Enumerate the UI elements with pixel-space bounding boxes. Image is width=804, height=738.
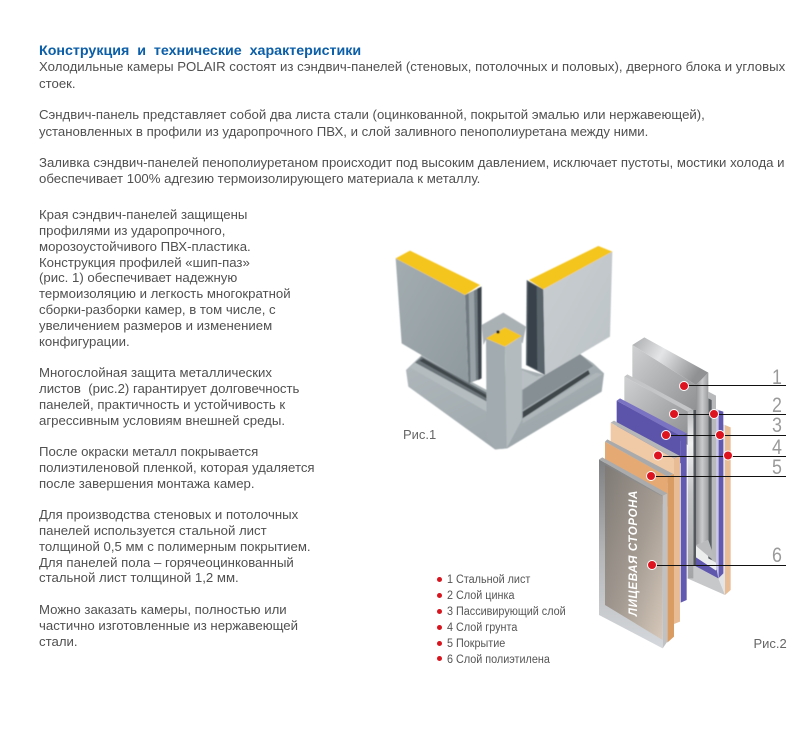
legend: 2 Слой цинка xyxy=(447,590,514,602)
left column text: steel sheet xyxy=(39,507,311,585)
intro paragraph 3: Заливка сэндвич-панелей пенополиуретаном происходит под высоким давлением, исключает пустоты, мостики холода и xyxy=(39,155,785,170)
legend: 4 Слой грунта xyxy=(447,622,517,634)
left column text: stainless option xyxy=(39,602,298,649)
floor of back layers xyxy=(687,565,725,595)
callout 3 xyxy=(662,414,786,440)
intro paragraph 1 xyxy=(39,59,785,90)
intro paragraph 3 xyxy=(39,155,785,186)
figure 1: corner profile with sandwich panels xyxy=(396,246,612,449)
left column text: protection: панелей, практичность и устойчивость к xyxy=(39,397,285,412)
callout 4: 4 xyxy=(772,436,782,459)
intro paragraph 2 xyxy=(39,107,705,138)
left column text: profiles: Края сэндвич-панелей защищены xyxy=(39,207,247,222)
layer 3: passivating layer xyxy=(617,398,687,603)
left column text: protection: агрессивным условиям внешней среды. xyxy=(39,413,285,428)
left column text: steel sheet: панелей используется стальной лист xyxy=(39,523,267,538)
intro paragraph 1: стоек. xyxy=(39,76,76,90)
callout 6: 6 xyxy=(772,544,782,567)
intro paragraph 3: обеспечивает 100% адгезию термоизолирующего материала к металлу. xyxy=(39,171,480,186)
figure 2 caption: Рис.2 xyxy=(754,636,787,651)
left sandwich panel xyxy=(396,251,482,383)
left column text: protection: листов (рис.2) гарантирует долговечность xyxy=(39,381,299,396)
left column text: profiles: конфигурации. xyxy=(39,334,130,349)
callout 2: 2 xyxy=(772,394,782,417)
back peach layer xyxy=(718,423,731,595)
left column text: steel sheet: Для производства стеновых и потолочных xyxy=(39,507,298,522)
layer 2: zinc layer xyxy=(624,374,696,578)
left column text: profiles: увеличением размеров и изменением xyxy=(39,318,272,333)
legend: 5 Покрытие xyxy=(447,638,505,650)
vertical face label: ЛИЦЕВАЯ СТОРОНА xyxy=(628,490,640,617)
legend: 3 Пассивирующий слой xyxy=(447,606,566,618)
legend: 6 Слой полиэтилена xyxy=(447,654,550,666)
left column text: profiles: сборки-разборки камер, в том числе, с xyxy=(39,302,276,317)
legend: 1 Стальной лист xyxy=(447,574,530,586)
callout 4 xyxy=(654,436,786,460)
left column text: film: после завершения монтажа камер. xyxy=(39,476,255,491)
left column text: profiles: профилями из ударопрочного, xyxy=(39,223,225,238)
left column text: profiles: Конструкция профилей «шип-паз» xyxy=(39,255,250,270)
legend xyxy=(437,574,566,666)
left column text: film: После окраски металл покрывается xyxy=(39,444,258,459)
inner steel channel xyxy=(693,392,716,571)
intro paragraph 2: установленных в профили из ударопрочного ПВХ, и слой заливного пенополиуретана между ними. xyxy=(39,124,648,138)
layer 4: primer layer xyxy=(611,421,680,624)
back purple layer xyxy=(693,409,723,578)
left column text: profiles: морозоустойчивого ПВХ-пластика. xyxy=(39,239,251,254)
callout 5: 5 xyxy=(772,456,782,479)
left column text: protection xyxy=(39,365,299,428)
callout 1 xyxy=(680,366,786,390)
left column text: profiles: (рис. 1) обеспечивает надежную xyxy=(39,270,237,285)
left column text: stainless option: стали. xyxy=(39,634,78,649)
left column text: steel sheet: толщиной 0,5 мм с полимерным покрытием. xyxy=(39,539,311,554)
left column text: steel sheet: Для панелей пола – горячеоцинкованный xyxy=(39,555,294,570)
left column text: stainless option: частично изготовленные из нержавеющей xyxy=(39,618,298,633)
figure 1 caption: Рис.1 xyxy=(403,427,436,442)
intro paragraph 1: Холодильные камеры POLAIR состоят из сэндвич-панелей (стеновых, потолочных и половых), дверного блока и угловых xyxy=(39,59,785,74)
figure 2: layered panel cross-section xyxy=(599,337,731,648)
intro paragraph 2: Сэндвич-панель представляет собой два листа стали (оцинкованной, покрытой эмалью или нержавеющей), xyxy=(39,107,705,122)
left column text: protection: Многослойная защита металлических xyxy=(39,365,272,380)
left column text: steel sheet: стальной лист толщиной 1,2 мм. xyxy=(39,570,239,585)
callout 3: 3 xyxy=(772,414,782,437)
layer 5: coating xyxy=(605,439,674,643)
callout 2 xyxy=(670,394,786,418)
left column text: stainless option: Можно заказать камеры, полностью или xyxy=(39,602,287,617)
base profile xyxy=(406,354,604,449)
layer 6: polyethylene front face xyxy=(599,457,667,648)
left column text: profiles: термоизоляцию и легкость многократной xyxy=(39,286,291,301)
layer 1: steel sheet xyxy=(632,337,708,545)
corner post xyxy=(486,327,522,449)
left column text: film: полиэтиленовой пленкой, которая удаляется xyxy=(39,460,315,475)
left column text: profiles xyxy=(39,207,291,349)
callout 5 xyxy=(646,456,786,480)
back block xyxy=(482,313,526,345)
left column text: film xyxy=(39,444,315,491)
callout 6 xyxy=(648,544,786,570)
right sandwich panel xyxy=(526,246,612,375)
title: Конструкция и технические характеристики xyxy=(39,43,361,59)
callout 1: 1 xyxy=(772,366,782,389)
